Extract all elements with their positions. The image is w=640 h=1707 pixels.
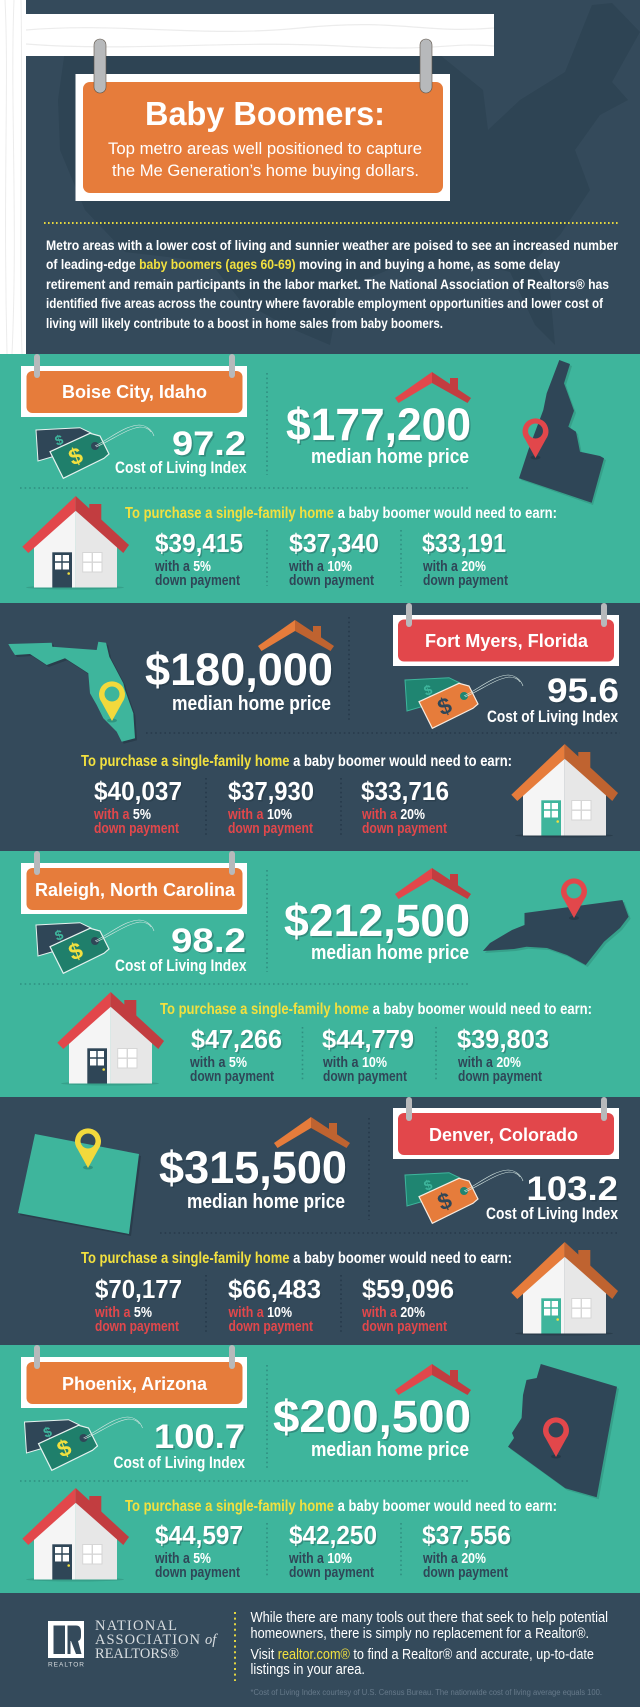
logo: association name: of [205,1632,218,1648]
icon: house [57,992,164,1086]
map: Idaho [519,360,606,505]
earnings: 10% down [227,776,314,837]
icon: price tags: $ [422,681,435,699]
icon: price tags [405,675,523,728]
earnings: 10% down: $37,340 [289,528,379,558]
cost of living index: 97.2 [172,425,246,463]
cost of living index: 103.2 [526,1170,618,1208]
earnings: 20% down: down payment [458,1069,542,1085]
city sign: Phoenix [21,1345,247,1408]
background map of the United States [58,3,640,345]
earnings: 20% down [361,1274,454,1335]
median home price: $315,500 [159,1142,347,1193]
call to action text: listings in your area. [250,1662,365,1678]
icon: map pin [522,418,548,460]
earnings heading: To purchase a single-family home a baby boomer would need to earn: [125,505,557,522]
earnings: 20% down: down payment [362,1319,447,1335]
median home price: $177,200 [286,399,471,450]
sign hooks [94,39,432,93]
earnings: 20% down: down payment [423,573,508,589]
icon: price tags [36,920,154,973]
earnings: 5% down: $47,266 [191,1024,282,1054]
earnings: 10% down: down payment [228,1319,313,1335]
panel: header [0,0,640,354]
icon: map pin [75,1128,101,1170]
city sign: Raleigh: Raleigh, North Carolina [35,880,236,900]
earnings: 10% down: $42,250 [289,1520,377,1550]
icon: price tags: $ [53,431,66,449]
earnings: 5% down: with a 5% [154,559,211,575]
median home price: $200,500 [273,1391,471,1442]
logo: REALTOR mark [48,1621,84,1668]
call to action text: homeowners, there is simply no replacement for a Realtor®. [250,1626,589,1642]
earnings: 5% down: with a 5% [93,807,151,823]
earnings: 20% down: with a 20% [361,1305,425,1321]
city sign: Raleigh [21,851,247,914]
title: Baby Boomers: [145,95,385,132]
panel: Boise City, Idaho [0,354,640,603]
earnings: 5% down: with a 5% [189,1055,247,1071]
earnings: 10% down: $66,483 [228,1274,321,1304]
earnings: 10% down [228,1274,321,1335]
earnings: 10% down: $37,930 [228,776,314,806]
map: North Carolina [483,878,631,967]
earnings heading: To purchase a single-family home a baby boomer would need to earn: [81,753,512,770]
earnings: 20% down: with a 20% [361,807,425,823]
intro paragraph [46,237,618,331]
panel: Denver, Colorado [0,1097,640,1345]
cost of living index [486,1170,619,1223]
earnings: 20% down [361,776,449,837]
subtitle [108,139,422,180]
median home price: median home price [172,693,331,715]
icon: price tags: $ [65,442,87,471]
subtitle: Top metro areas well positioned to capture [108,139,422,158]
earnings: 5% down [93,776,182,837]
median home price [273,1391,471,1461]
earnings heading: To purchase a single-family home a baby boomer would need to earn: [125,1498,557,1515]
icon: price tags [405,1170,523,1223]
median home price: median home price [311,1439,469,1461]
icon: price tags: $ [422,1176,435,1194]
earnings: 10% down: with a 10% [288,559,352,575]
earnings: 10% down: with a 10% [227,807,292,823]
earnings: 5% down: down payment [95,1319,179,1335]
cost of living index [115,425,247,477]
panel: Raleigh, North Carolina [0,851,640,1097]
median home price: median home price [311,446,469,468]
icon: price tags [36,425,154,478]
icon: map pin [543,1417,569,1458]
median home price: $212,500 [284,895,470,946]
call to action text: Visit realtor.com® to find a Realtor® and accurate, up-to-date [250,1647,594,1663]
earnings: 10% down: $44,779 [322,1024,414,1054]
earnings: 5% down: down payment [190,1069,274,1085]
map: Florida [8,642,137,744]
city sign: Phoenix: Phoenix, Arizona [62,1374,208,1394]
cost of living index: 95.6 [547,672,619,710]
city sign: Fort Myers: Fort Myers, Florida [425,631,589,651]
icon: roof [395,372,471,403]
earnings: 20% down: $39,803 [457,1024,549,1054]
city sign: Boise: Boise City, Idaho [62,382,207,402]
earnings: 5% down: $44,597 [155,1520,243,1550]
icon: house [22,1488,129,1582]
icon: price tags: $ [53,926,66,944]
earnings: 10% down [288,1520,377,1581]
icon: house [22,496,129,590]
icon: price tags: $ [53,1434,75,1463]
earnings: 20% down: $33,716 [361,776,449,806]
earnings: 20% down [422,1520,511,1581]
intro paragraph: of leading-edge baby boomers (ages 60-69) moving in and buying a home, as some delay [46,256,560,272]
earnings: 5% down: $39,415 [155,528,243,558]
cost of living index: Cost of Living Index [486,1205,619,1223]
earnings: 20% down: down payment [362,821,447,837]
earnings: 10% down [288,528,379,589]
earnings: 10% down: down payment [228,821,313,837]
earnings: 5% down: $40,037 [94,776,182,806]
earnings: 10% down: down payment [323,1069,407,1085]
earnings: 5% down: down payment [94,821,179,837]
earnings: 10% down: down payment [289,573,374,589]
earnings: 5% down: with a 5% [94,1305,152,1321]
logo: association name: NATIONAL [95,1618,177,1634]
earnings: 10% down: with a 10% [228,1305,292,1321]
map: Colorado [18,1128,141,1236]
subtitle: the Me Generation’s home buying dollars. [112,161,419,180]
icon: map pin [99,681,125,722]
earnings: 5% down [154,528,243,589]
icon: roof [395,868,471,899]
panel: footer [0,1593,640,1707]
earnings: 20% down: $37,556 [422,1520,511,1550]
icon: house [511,744,618,838]
panel: Phoenix, Arizona [0,1345,640,1593]
earnings: 10% down: down payment [289,1565,374,1581]
cost of living index: Cost of Living Index [487,708,619,726]
cost of living index: Cost of Living Index [115,459,247,477]
intro paragraph: living will likely contribute to a boost in home sales from baby boomers. [46,315,443,331]
cost of living index: 100.7 [154,1418,245,1456]
icon: house [511,1242,618,1336]
city sign: Boise [21,354,247,417]
hanging sign: title [76,39,450,201]
icon: price tags: $ [434,1187,456,1216]
icon: price tags: $ [434,692,456,721]
earnings: 20% down: with a 20% [422,559,486,575]
earnings: 5% down: $70,177 [95,1274,182,1304]
earnings: 20% down: with a 20% [422,1551,486,1567]
icon: price tags: $ [41,1423,54,1441]
earnings: 5% down: down payment [155,1565,240,1581]
cost of living index: Cost of Living Index [114,1454,246,1472]
earnings: 10% down [322,1024,414,1085]
cost of living index [487,672,619,726]
earnings: 5% down [94,1274,182,1335]
earnings: 20% down [457,1024,549,1085]
earnings heading: To purchase a single-family home a baby boomer would need to earn: [160,1001,592,1018]
map: Arizona [508,1364,619,1499]
median home price: $180,000 [145,644,333,695]
icon: roof [274,1117,350,1148]
logo: association name [95,1618,218,1662]
earnings: 20% down: $33,191 [422,528,506,558]
median home price: median home price [311,942,469,964]
wood post [0,0,26,354]
icon: roof [395,1364,471,1395]
icon: roof [258,620,334,651]
cost of living index: 98.2 [171,922,246,960]
earnings: 5% down [189,1024,282,1085]
call to action text [250,1610,608,1678]
cost of living index [115,922,247,975]
earnings: 20% down: $59,096 [362,1274,454,1304]
earnings: 10% down: with a 10% [322,1055,387,1071]
earnings: 5% down: down payment [155,573,240,589]
median home price: median home price [187,1191,345,1213]
earnings: 10% down: with a 10% [288,1551,352,1567]
earnings: 5% down [154,1520,243,1581]
city sign: Fort Myers [393,603,619,666]
logo: association name: REALTORS® [95,1646,179,1662]
logo: REALTOR mark: REALTOR [48,1662,84,1668]
logo: association name: ASSOCIATION [95,1632,201,1648]
icon: map pin [561,878,587,920]
earnings: 5% down: with a 5% [154,1551,211,1567]
city sign: Denver [393,1097,619,1159]
earnings: 20% down: with a 20% [457,1055,521,1071]
earnings: 20% down: down payment [423,1565,508,1581]
city sign: Denver: Denver, Colorado [429,1125,578,1145]
icon: price tags [24,1417,142,1470]
cost of living index [114,1418,246,1472]
wood plank [26,14,494,56]
earnings: 20% down [422,528,508,589]
footnote: *Cost of Living Index courtesy of U.S. Census Bureau. The nationwide cost of living average equals 100. [250,1688,602,1697]
icon: price tags: $ [65,937,87,966]
panel: Fort Myers, Florida [0,603,640,851]
cost of living index: Cost of Living Index [115,957,247,975]
earnings heading: To purchase a single-family home a baby boomer would need to earn: [81,1250,512,1267]
